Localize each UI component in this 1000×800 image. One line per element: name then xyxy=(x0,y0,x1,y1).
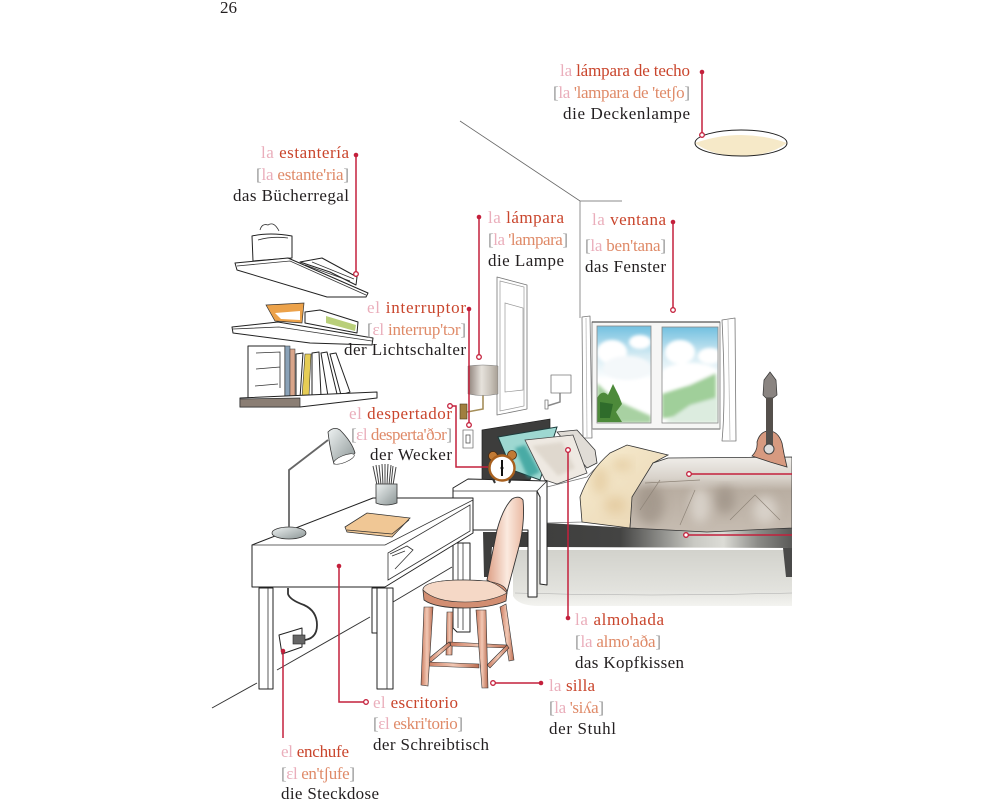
label: el enchufe: el enchufe xyxy=(281,742,349,761)
icon: wall lamp right xyxy=(545,375,571,409)
top shelf with box and books xyxy=(235,224,368,297)
label: la silla xyxy=(549,676,616,738)
skirting line xyxy=(212,567,452,708)
label: la estantería: [la estante'ria] xyxy=(256,165,349,184)
label: el escritorio xyxy=(373,693,490,754)
label: el escritorio: el escritorio xyxy=(373,693,458,712)
room outline: ceiling and wall edge xyxy=(460,121,622,318)
label: el enchufe: [ɛl en'tʃufe] xyxy=(281,764,355,783)
label: la lámpara de techo: [la 'lampara de 'tetʃo] xyxy=(553,83,690,102)
label: la silla: der Stuhl xyxy=(549,719,616,738)
label: el interruptor: der Lichtschalter xyxy=(344,340,466,359)
illustration: bookshelves xyxy=(232,224,377,407)
icon: desk lamp xyxy=(272,428,356,539)
leader lines xyxy=(281,70,792,738)
label: la almohada: la almohada xyxy=(575,610,664,629)
label: la almohada: [la almo'aða] xyxy=(575,632,661,651)
illustration: curtains xyxy=(582,316,736,441)
illustration: rug and floor xyxy=(513,550,792,606)
chair seat xyxy=(423,580,507,608)
illustration: window with landscape xyxy=(592,322,722,429)
icon: power outlet with cable xyxy=(279,588,317,654)
label: la almohada: das Kopfkissen xyxy=(575,653,684,672)
icon: wall lamp left xyxy=(460,365,498,419)
icon: pencil cup xyxy=(373,464,397,505)
label: el enchufe xyxy=(281,742,379,800)
icon: light switch xyxy=(463,430,473,448)
label: la silla: [la 'siʎa] xyxy=(549,698,604,717)
label: la estantería: la estantería xyxy=(261,143,349,162)
bed frame xyxy=(483,523,792,577)
front pillow xyxy=(525,435,587,484)
illustration: wall frame xyxy=(497,277,527,415)
label: la ventana xyxy=(585,210,666,276)
label: el escritorio: [ɛl eskri'torio] xyxy=(373,714,463,733)
label: la almohada xyxy=(575,610,684,672)
desktop xyxy=(252,498,473,587)
label: el despertador: el despertador xyxy=(349,404,452,423)
label: la lámpara xyxy=(488,208,568,270)
illustration: chair xyxy=(421,497,524,688)
back pillow xyxy=(557,430,597,468)
icon: ceiling lamp xyxy=(695,130,787,156)
label: la silla: la silla xyxy=(549,676,595,695)
label: el despertador: der Wecker xyxy=(370,445,452,464)
duvet cream fold xyxy=(580,445,668,528)
label: el interruptor: el interruptor xyxy=(367,298,466,317)
illustration: nightstand xyxy=(453,479,547,597)
back legs xyxy=(372,543,470,633)
label: la estantería xyxy=(233,143,349,205)
label: el interruptor xyxy=(344,298,466,359)
mattress sheet xyxy=(547,453,612,523)
chair legs xyxy=(421,604,514,688)
illustration: guitar xyxy=(752,372,787,467)
label: la lámpara de techo: die Deckenlampe xyxy=(563,104,690,123)
bottom shelf with binders xyxy=(240,346,377,407)
teal pillow xyxy=(498,427,557,480)
illustration: bed xyxy=(482,419,792,577)
duvet grey xyxy=(630,457,792,532)
chair back xyxy=(487,497,524,592)
label: el interruptor: [ɛl interrup'tɔr] xyxy=(367,320,466,339)
label: la ventana: la ventana xyxy=(592,210,666,229)
middle shelf with books xyxy=(232,303,373,345)
illustration: desk xyxy=(252,498,473,689)
label: la ventana: das Fenster xyxy=(585,257,666,276)
drawer opening xyxy=(388,505,470,580)
label: el despertador: [ɛl desperta'ðɔr] xyxy=(351,425,452,444)
label: la lámpara: die Lampe xyxy=(488,251,564,270)
label: la lámpara: [la 'lampara] xyxy=(488,230,568,249)
label: el escritorio: der Schreibtisch xyxy=(373,735,490,754)
front legs xyxy=(259,588,393,689)
icon: alarm clock xyxy=(488,450,516,483)
headboard xyxy=(482,419,550,480)
drawer contents xyxy=(390,546,413,569)
label: la lámpara de techo xyxy=(553,61,690,123)
label: la ventana: [la ben'tana] xyxy=(585,236,666,255)
icon: book on desk xyxy=(345,513,410,537)
label: la lámpara de techo: la lámpara de techo xyxy=(560,61,690,80)
label: el despertador xyxy=(349,404,452,464)
label: la estantería: das Bücherregal xyxy=(233,186,349,205)
label: la lámpara: la lámpara xyxy=(488,208,564,227)
